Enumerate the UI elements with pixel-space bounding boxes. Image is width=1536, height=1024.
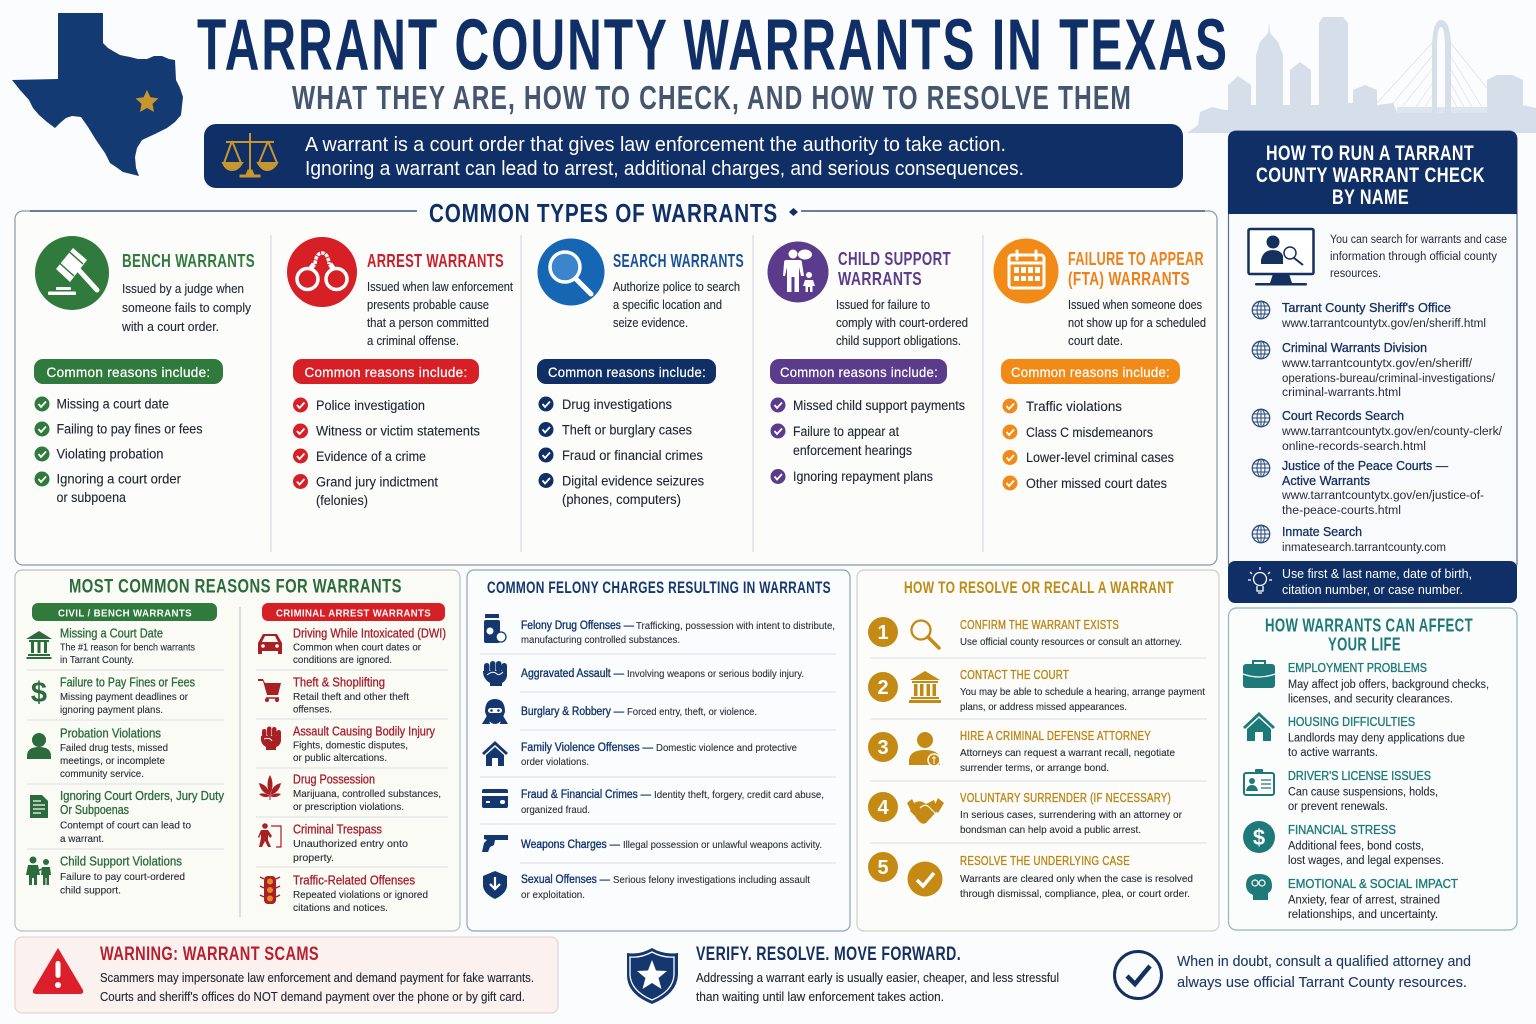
item: missing a court date: The #1 reason for bench warrants — [60, 642, 195, 654]
checklist: Missing a court date — [56, 396, 169, 412]
verify resolve text block: than waiting until law enforcement takes action. — [696, 989, 944, 1004]
column: child support warrants — [768, 242, 968, 484]
step 2: contact: CONTACT THE COURT — [960, 668, 1069, 682]
checklist — [538, 396, 704, 507]
description — [121, 281, 251, 334]
item: probation violations: Probation Violations — [60, 726, 161, 740]
item: financial stress: FINANCIAL STRESS — [1288, 823, 1396, 837]
checklist — [293, 398, 480, 508]
item: driver's license: Can cause suspensions, holds, — [1288, 786, 1438, 798]
item: sexual offenses: or exploitation. — [521, 890, 585, 901]
checklist — [34, 396, 203, 505]
icon: police badge shield — [627, 948, 678, 1004]
badge: 4 — [868, 792, 898, 822]
item: weapons charges: Weapons Charges — — [521, 839, 620, 851]
icon: dollar sign: $ — [31, 677, 47, 709]
item: fraud and financial crimes — [482, 789, 824, 816]
heading: warning: WARNING: WARRANT SCAMS — [100, 944, 319, 965]
step 4: surrender: In serious cases, surrendering with an attorney or — [960, 809, 1182, 821]
panel: how warrants can affect your life — [1228, 608, 1517, 930]
description: Issued when someone does — [1068, 297, 1202, 312]
checklist: Grand jury indictment — [316, 474, 438, 490]
icon: attorney — [909, 732, 940, 766]
intro text: information through official county — [1330, 251, 1497, 263]
verify resolve text block — [696, 944, 1059, 1004]
icon: briefcase — [1243, 661, 1275, 688]
icon: check circle — [908, 862, 942, 896]
item: fraud and financial crimes: Identity theft, forgery, credit card abuse, — [654, 790, 824, 801]
item: driver's license — [1244, 769, 1438, 813]
item: probation violations — [27, 726, 168, 780]
intro text: resources. — [1330, 268, 1381, 280]
checklist: Drug investigations — [562, 397, 672, 412]
item: failure to pay fines: ignoring payment plans. — [60, 704, 163, 716]
checklist: Failure to appear at — [793, 424, 899, 439]
icon: ID card — [1244, 769, 1274, 795]
icon: scales of justice — [223, 133, 277, 177]
intro text: You can search for warrants and case — [1330, 234, 1507, 246]
item: traffic-related offenses: Traffic-Related Offenses — [293, 874, 415, 888]
description: Issued by a judge when — [122, 281, 244, 296]
icon: Texas map with star — [12, 13, 183, 176]
item: financial stress — [1243, 821, 1444, 867]
icon: dollar coin: $ — [1253, 825, 1265, 850]
icon: courthouse — [909, 671, 941, 703]
item: financial stress: lost wages, and legal expenses. — [1288, 855, 1444, 867]
item: failure to pay fines: Missing payment deadlines or — [60, 691, 188, 703]
item: child support violations — [26, 854, 185, 896]
item: driver's license: DRIVER'S LICENSE ISSUES — [1288, 769, 1431, 783]
step 2: contact: You may be able to schedule a hearing, arrange payment — [960, 686, 1205, 698]
closing advice text: always use official Tarrant County resources. — [1177, 975, 1467, 991]
description: a specific location and — [613, 297, 722, 312]
resource: justice of the peace: www.tarrantcountytx.gov/en/justice-of- — [1281, 490, 1484, 502]
step 4: surrender: VOLUNTARY SURRENDER (IF NECESSARY) — [960, 791, 1171, 805]
icon: handgun — [482, 835, 508, 852]
item: theft and shoplifting: Retail theft and other theft — [293, 691, 409, 703]
item: felony drug offenses: Felony Drug Offenses — — [521, 620, 634, 632]
banner text: A warrant is a court order that gives law enforcement the authority to take action. — [305, 133, 1006, 156]
item: aggravated assault: Involving weapons or serious bodily injury. — [627, 669, 804, 680]
description: Authorize police to search — [613, 279, 740, 294]
item: family violence offenses: order violations. — [521, 757, 589, 768]
item: family violence offenses: Family Violence Offenses — — [521, 742, 653, 754]
pill: common reasons — [537, 359, 716, 384]
icon: house — [1243, 712, 1275, 741]
column: arrest warrants — [287, 237, 513, 508]
item: criminal trespass: Unauthorized entry onto — [293, 838, 408, 850]
checklist: Theft or burglary cases — [562, 422, 692, 438]
badge: 4: 4 — [877, 797, 889, 819]
item: burglary and robbery: Burglary & Robbery — — [521, 706, 624, 718]
resource: criminal warrants: criminal-warrants.html — [1282, 387, 1401, 399]
pill: common reasons — [1001, 359, 1180, 384]
warning text — [100, 970, 534, 1004]
item: family violence offenses — [482, 741, 797, 768]
icon: magnifying glass — [538, 238, 604, 306]
heading: affect your life: YOUR LIFE — [1328, 634, 1401, 654]
badge: 2 — [868, 672, 898, 702]
panel: warrant check by name — [1228, 131, 1517, 603]
icon: parent and child — [768, 242, 828, 302]
resource: inmate search: inmatesearch.tarrantcounty.com — [1282, 542, 1446, 554]
icon: masked burglar — [482, 699, 508, 724]
item: drug possession — [259, 772, 441, 813]
checklist: Evidence of a crime — [316, 449, 426, 464]
heading: failure to appear warrants: (FTA) WARRANTS — [1068, 268, 1190, 289]
item: sexual offenses: Sexual Offenses — — [521, 874, 610, 886]
item: failure to pay fines: Failure to Pay Fines or Fees — [60, 676, 195, 690]
icon: fist — [261, 726, 281, 750]
item: family violence offenses: Domestic violence and protective — [656, 743, 797, 754]
column: bench warrants — [34, 236, 255, 505]
item: drug possession: Drug Possession — [293, 772, 375, 786]
checklist: Witness or victim statements — [316, 424, 480, 438]
description: that a person committed — [367, 315, 489, 330]
panel: how to resolve or recall — [857, 570, 1219, 931]
step 3: attorney — [868, 729, 1175, 774]
step 5: resolve: Warrants are cleared only when the case is resolved — [960, 873, 1193, 885]
description: with a court order. — [121, 319, 219, 334]
checklist — [770, 398, 965, 484]
heading: affect your life — [1265, 616, 1473, 654]
badge: 3: 3 — [877, 737, 889, 759]
pill: common reasons — [770, 359, 947, 384]
heading: most common reasons: MOST COMMON REASONS FOR WARRANTS — [69, 576, 402, 598]
heading: failure to appear warrants: FAILURE TO APPEAR — [1068, 248, 1204, 269]
checklist: Fraud or financial crimes — [562, 448, 703, 463]
icon: calendar — [994, 238, 1058, 304]
heading: child support warrants: CHILD SUPPORT — [838, 248, 951, 269]
icon: traffic light — [260, 876, 280, 904]
step 3: attorney: HIRE A CRIMINAL DEFENSE ATTORNEY — [960, 729, 1151, 743]
description: a criminal offense. — [367, 333, 459, 348]
item: missing a court date: Missing a Court Date — [60, 626, 163, 640]
item: child support violations: child support. — [60, 884, 121, 896]
checklist: (felonies) — [316, 493, 368, 508]
item: housing: HOUSING DIFFICULTIES — [1288, 715, 1415, 729]
icon: person at door — [258, 823, 281, 847]
heading: warrant check — [1256, 142, 1485, 209]
item: probation violations: community service. — [60, 768, 144, 780]
resource: court records: www.tarrantcountytx.gov/en/county-clerk/ — [1281, 426, 1503, 438]
icon: fist — [483, 661, 507, 686]
tip bar: citation number, or case number. — [1282, 583, 1463, 597]
verify resolve text block: Addressing a warrant early is usually easier, cheaper, and less stressful — [696, 970, 1059, 985]
description: court date. — [1068, 333, 1123, 348]
tip bar — [1228, 561, 1517, 603]
icon: adult and child — [26, 856, 51, 885]
resource: sheriff: www.tarrantcountytx.gov/en/sheriff.html — [1281, 318, 1486, 330]
description: seize evidence. — [613, 315, 688, 330]
resource: criminal warrants: operations-bureau/criminal-investigations/ — [1282, 373, 1496, 385]
item: aggravated assault — [483, 661, 804, 686]
badge: 1: 1 — [877, 622, 889, 644]
item: financial stress: Additional fees, bond costs, — [1288, 840, 1424, 852]
item: criminal trespass: Criminal Trespass — [293, 822, 382, 836]
item: driver's license: or prevent renewals. — [1288, 801, 1388, 813]
resource: criminal warrants: www.tarrantcountytx.gov/en/sheriff/ — [1281, 358, 1473, 370]
definition banner — [204, 124, 1183, 188]
icon: shield — [483, 871, 507, 899]
heading: how to resolve: HOW TO RESOLVE OR RECALL A WARRANT — [904, 579, 1174, 597]
checklist: Missed child support payments — [793, 398, 965, 413]
item: probation violations: meetings, or incomplete — [60, 755, 165, 767]
heading: child support warrants: WARRANTS — [838, 268, 922, 289]
banner text — [305, 133, 1024, 180]
item: criminal trespass: property. — [293, 852, 334, 864]
item: burglary and robbery — [482, 699, 757, 724]
description: comply with court-ordered — [836, 315, 968, 330]
item: sexual offenses: Serious felony investigations including assault — [613, 875, 810, 886]
checklist: Traffic violations — [1026, 399, 1122, 414]
item: assault: Fights, domestic disputes, — [293, 740, 408, 752]
icon: shopping cart — [258, 679, 281, 702]
item: felony drug offenses: manufacturing controlled substances. — [521, 635, 680, 646]
icon: handcuffs — [287, 237, 357, 307]
pill: criminal arrest warrants: CRIMINAL ARREST WARRANTS — [276, 608, 431, 620]
item: traffic-related offenses — [260, 874, 428, 914]
pill: common reasons — [293, 359, 479, 384]
badge: 1 — [868, 617, 898, 647]
checklist: Police investigation — [316, 398, 425, 413]
item: employment — [1243, 661, 1489, 706]
banner text: Ignoring a warrant can lead to arrest, additional charges, and serious consequences. — [305, 157, 1024, 180]
step 5: resolve: through dismissal, compliance, plea, or court order. — [960, 888, 1190, 900]
checklist: enforcement hearings — [793, 443, 912, 458]
step 4: surrender: bondsman can help avoid a public arrest. — [960, 824, 1141, 836]
icon: computer search — [1248, 229, 1314, 286]
item: weapons charges — [482, 835, 822, 852]
item: housing — [1243, 712, 1465, 759]
item: traffic-related offenses: Repeated violations or ignored — [293, 889, 428, 901]
item: ignoring court orders: Contempt of court can lead to — [60, 820, 191, 832]
icon: handshake — [907, 798, 944, 824]
item: failure to pay fines — [31, 676, 195, 716]
description — [836, 297, 968, 348]
tip bar: Use first & last name, date of birth, — [1282, 567, 1472, 581]
item: probation violations: Failed drug tests, missed — [60, 742, 168, 754]
checklist: Lower-level criminal cases — [1026, 450, 1174, 465]
icon: person — [27, 733, 51, 759]
icon: check mark circle — [1114, 952, 1162, 998]
item: felony drug offenses: Trafficking, possession with intent to distribute, — [636, 621, 835, 632]
column: failure to appear warrants — [994, 238, 1206, 491]
checklist: Class C misdemeanors — [1026, 425, 1153, 440]
item: employment: EMPLOYMENT PROBLEMS — [1288, 661, 1427, 675]
item: ignoring court orders — [30, 789, 225, 845]
item: fraud and financial crimes: organized fraud. — [521, 805, 590, 816]
description — [367, 279, 513, 348]
item: theft and shoplifting: offenses. — [293, 704, 332, 716]
column: search warrants — [537, 238, 744, 507]
icon: gavel — [35, 236, 109, 310]
description: not show up for a scheduled — [1068, 315, 1206, 330]
resource: inmate search: Inmate Search — [1282, 525, 1362, 539]
description: presents probable cause — [367, 297, 489, 312]
pill: common reasons: Common reasons include: — [1011, 364, 1170, 380]
verify resolve text block: VERIFY. RESOLVE. MOVE FORWARD. — [696, 944, 961, 965]
pill: common reasons: Common reasons include: — [46, 364, 210, 380]
checklist: Violating probation — [56, 446, 164, 462]
icon: car — [258, 634, 282, 654]
description: child support obligations. — [836, 333, 961, 348]
item: ignoring court orders: a warrant. — [60, 833, 104, 845]
pill: common reasons: Common reasons include: — [304, 364, 468, 380]
pill: civil bench warrants: CIVIL / BENCH WARRANTS — [58, 608, 192, 620]
item: emotional and social impact: Anxiety, fear of arrest, strained — [1288, 894, 1440, 906]
item: emotional and social impact — [1246, 874, 1458, 921]
intro text — [1330, 234, 1507, 280]
badge: 5 — [868, 852, 898, 882]
item: DWI — [258, 626, 446, 666]
item: fraud and financial crimes: Fraud & Financial Crimes — — [521, 789, 651, 801]
item: missing a court date: in Tarrant County. — [60, 654, 134, 666]
step 4: surrender — [868, 791, 1182, 836]
pill: civil bench warrants — [32, 603, 217, 621]
warning text: Courts and sheriff's offices do NOT demand payment over the phone or by gift card. — [100, 989, 525, 1004]
heading: failure to appear warrants — [1068, 248, 1204, 289]
item: ignoring court orders: Ignoring Court Orders, Jury Duty — [60, 789, 225, 803]
item: child support violations: Failure to pay court-ordered — [60, 871, 185, 883]
resource: sheriff: Tarrant County Sheriff's Office — [1282, 301, 1451, 315]
item: theft and shoplifting: Theft & Shoplifting — [293, 676, 385, 690]
closing advice text — [1177, 954, 1471, 991]
badge: 2: 2 — [877, 677, 889, 699]
item: housing: Landlords may deny applications due — [1288, 732, 1465, 744]
step 5: resolve: RESOLVE THE UNDERLYING CASE — [960, 854, 1130, 868]
step 2: contact — [868, 668, 1205, 713]
subtitle: WHAT THEY ARE, HOW TO CHECK, AND HOW TO RESOLVE THEM — [292, 79, 1132, 116]
checklist — [1002, 398, 1174, 491]
resource: justice of the peace — [1252, 459, 1484, 517]
resource: court records — [1252, 409, 1503, 453]
item: aggravated assault: Aggravated Assault — — [521, 668, 624, 680]
heading: arrest warrants: ARREST WARRANTS — [367, 250, 504, 271]
item: theft and shoplifting — [258, 676, 409, 716]
pill: common reasons: Common reasons include: — [780, 364, 938, 380]
item: emotional and social impact: relationships, and uncertainty. — [1288, 909, 1438, 921]
step 2: contact: plans, or address missed appearances. — [960, 701, 1127, 713]
description — [613, 279, 740, 330]
icon: light bulb — [1248, 567, 1272, 593]
resource: court records: online-records-search.html — [1282, 441, 1426, 453]
checklist: Digital evidence seizures — [562, 474, 704, 488]
step 3: attorney: surrender terms, or arrange bond. — [960, 762, 1109, 774]
icon: magnifier — [912, 620, 939, 648]
icon: dollar coin — [1243, 821, 1275, 853]
heading: warrant check: HOW TO RUN A TARRANT — [1266, 142, 1474, 165]
heading: common felony charges: COMMON FELONY CHARGES RESULTING IN WARRANTS — [487, 579, 831, 597]
badge: 5: 5 — [877, 857, 889, 879]
item: assault: Assault Causing Bodily Injury — [293, 724, 436, 738]
pill: criminal arrest warrants — [262, 603, 445, 621]
item: emotional and social impact: EMOTIONAL & SOCIAL IMPACT — [1288, 877, 1458, 891]
pill: common reasons — [34, 359, 223, 384]
item: employment: May affect job offers, background checks, — [1288, 679, 1489, 691]
item: felony drug offenses — [484, 614, 835, 646]
heading: bench warrants: BENCH WARRANTS — [122, 250, 255, 271]
heading: warrant check: BY NAME — [1332, 186, 1409, 209]
resource: court records: Court Records Search — [1282, 409, 1404, 423]
item: DWI: Driving While Intoxicated (DWI) — [293, 626, 446, 640]
closing advice text: When in doubt, consult a qualified attorney and — [1177, 954, 1471, 970]
item: criminal trespass — [258, 822, 408, 864]
heading: search warrants: SEARCH WARRANTS — [613, 250, 744, 271]
item: drug possession: or prescription violations. — [293, 801, 404, 813]
panel: common felony charges — [467, 570, 850, 931]
item: employment: licenses, and security clearances. — [1288, 694, 1453, 706]
resource: sheriff — [1252, 301, 1486, 330]
panel: most common reasons — [15, 570, 460, 931]
icon: pill bottle — [484, 614, 506, 643]
icon: leaf — [259, 775, 281, 800]
description: Issued for failure to — [836, 297, 930, 312]
step 1: confirm: Use official county resources or consult an attorney. — [960, 636, 1182, 648]
icon: credit card — [482, 789, 508, 808]
resource: justice of the peace: Active Warrants — [1282, 474, 1370, 488]
resource: justice of the peace: the-peace-courts.html — [1282, 505, 1401, 517]
step 1: confirm — [868, 617, 1182, 648]
resource: inmate search — [1252, 525, 1446, 554]
item: housing: to active warrants. — [1288, 747, 1378, 759]
item: DWI: Common when court dates or — [293, 642, 421, 654]
checklist: Other missed court dates — [1026, 476, 1167, 491]
pill: common reasons: Common reasons include: — [548, 364, 706, 380]
icon: head — [1246, 874, 1272, 900]
checklist: Ignoring a court order — [56, 472, 181, 486]
description — [1068, 297, 1206, 348]
checklist: or subpoena — [56, 490, 126, 505]
item: traffic-related offenses: citations and notices. — [293, 902, 388, 914]
checklist: (phones, computers) — [562, 492, 681, 507]
step 5: resolve — [868, 852, 1193, 900]
step 3: attorney: Attorneys can request a warrant recall, negotiate — [960, 747, 1175, 759]
icon: courthouse — [26, 631, 52, 659]
icon: house — [482, 741, 508, 766]
item: assault — [261, 724, 436, 764]
item: sexual offenses — [483, 871, 810, 901]
resource: criminal warrants: Criminal Warrants Division — [1282, 341, 1427, 355]
badge: 3 — [868, 732, 898, 762]
item: missing a court date — [26, 626, 195, 666]
heading: common types of warrants: COMMON TYPES OF WARRANTS — [429, 198, 778, 228]
resource: justice of the peace: Justice of the Peace Courts — — [1282, 459, 1448, 473]
item: burglary and robbery: Forced entry, theft, or violence. — [627, 707, 757, 718]
icon: document — [30, 795, 48, 818]
heading: child support warrants — [838, 248, 951, 289]
checklist: Ignoring repayment plans — [793, 469, 933, 484]
item: drug possession: Marijuana, controlled substances, — [293, 788, 441, 800]
step 1: confirm: CONFIRM THE WARRANT EXISTS — [960, 618, 1119, 632]
icon: warning triangle — [33, 948, 83, 994]
panel: warning scams — [15, 937, 558, 1013]
item: DWI: conditions are ignored. — [293, 654, 392, 666]
item: assault: or public altercations. — [293, 752, 387, 764]
warning text: Scammers may impersonate law enforcement and demand payment for fake warrants. — [100, 970, 534, 985]
checklist: Failing to pay fines or fees — [56, 422, 203, 436]
item: child support violations: Child Support Violations — [60, 854, 182, 868]
skyline illustration — [1187, 17, 1536, 133]
description: someone fails to comply — [122, 300, 251, 315]
item: ignoring court orders: Or Subpoenas — [60, 803, 129, 817]
panel: common types of warrants — [15, 198, 1217, 565]
item: weapons charges: Illegal possession or unlawful weapons activity. — [623, 840, 822, 851]
description: Issued when law enforcement — [367, 279, 513, 294]
resource: criminal warrants — [1252, 341, 1496, 399]
